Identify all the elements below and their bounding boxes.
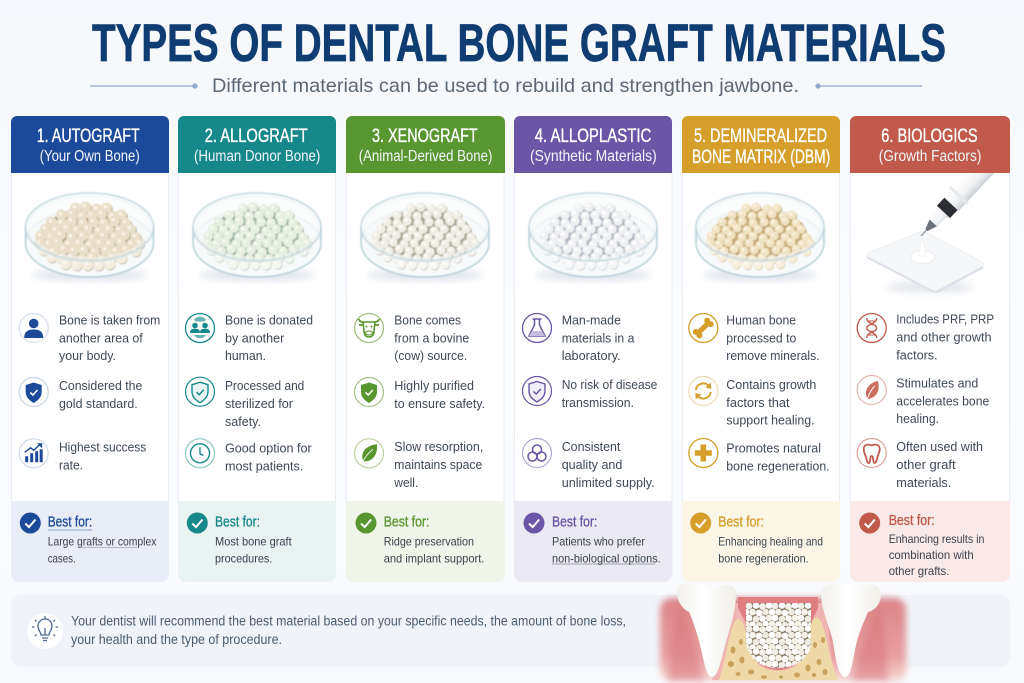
text block: processed to [726,330,796,345]
panel: demineralized bone matrix [682,116,840,582]
header: 6. BIOLOGICS [881,125,978,147]
header [346,116,505,173]
best for: Best for: [384,515,429,531]
callout: dentist note [11,595,1010,667]
panel: biologics [850,116,1010,582]
text block: most patients. [225,459,303,474]
text block: gold standard. [59,396,138,411]
header: (Your Own Bone) [40,148,140,165]
text block: materials. [896,475,951,490]
text block: from a bovine [394,330,469,345]
icon: shield outline [186,377,214,406]
text block [896,439,983,490]
text block: bone regeneration. [726,458,830,474]
panel: xenograft [346,116,505,582]
text block: factors that [726,395,790,410]
header [682,116,840,173]
header: (Human Donor Bone) [194,148,320,165]
callout text: Your dentist will recommend the best material based on your specific needs, the amount of bone loss, [71,614,626,629]
icon: shield [354,378,384,406]
text block: Bone is taken from [59,312,160,328]
text block: accelerates bone [896,394,989,408]
image: dish of beads [361,193,489,280]
text block [562,312,635,363]
text block: Processed and [225,378,304,393]
text block: Human bone [726,312,796,328]
best for: Enhancing results in [889,532,984,546]
bone [719,617,838,680]
text block: sterilized for [225,396,294,411]
text block: Highest success [59,440,147,455]
best for [682,501,840,582]
text block: Stimulates and [896,376,978,391]
text block: Highly purified [394,378,474,393]
text block [394,378,485,411]
text block [562,439,655,490]
image: dish of beads [529,193,657,280]
text block [59,312,160,363]
icon: clock [186,439,214,468]
header [514,116,672,173]
best for [346,501,505,582]
text block [394,312,469,363]
subtitle: Different materials can be used to rebuild and strengthen jawbone. [212,75,799,97]
header: 4. ALLOPLASTIC [535,125,651,147]
header: BONE MATRIX (DBM) [692,146,830,168]
text block: Bone is donated [225,312,313,328]
best for: Large grafts or complex [48,535,156,549]
left tooth [677,583,736,677]
image: syringe on plate [867,157,996,293]
best for: non-biological options. [552,551,661,565]
text block: laboratory. [562,348,621,363]
text block: maintains space [394,457,482,472]
text block: safety. [225,414,261,429]
text block [896,376,989,426]
best for [178,501,336,582]
best for [850,501,1010,582]
icon: shield [19,378,48,406]
header: (Synthetic Materials) [530,148,657,165]
panel: alloplastic [514,116,672,582]
panel: allograft [178,116,336,582]
icon: cow [354,314,384,342]
text block [225,378,304,429]
best for: Best for: [889,513,935,529]
subtitle [90,75,922,97]
text block: Considered the [59,378,142,393]
text block: and other growth [896,330,992,344]
text block: by another [225,330,285,345]
text block: Includes PRF, PRP [896,312,994,327]
image: dish of beads [696,193,824,280]
text block: Contains growth [726,377,816,392]
text block: healing. [896,411,939,426]
panel: autograft [11,116,169,582]
text block: Man-made [562,312,621,328]
header [11,116,169,173]
text block: materials in a [562,330,635,345]
graft granules [738,597,818,670]
callout text [71,614,626,647]
illustration: teeth with bone graft [660,583,906,682]
text block: rate. [59,458,83,473]
best for: other grafts. [889,564,949,578]
text block: (cow) source. [394,348,467,363]
best for: Best for: [215,515,260,531]
header [850,116,1010,173]
text block: factors. [896,348,938,362]
text block [726,440,830,474]
text block: Bone comes [394,312,461,328]
header: (Growth Factors) [879,148,981,165]
icon: chart [19,439,48,468]
text block [59,378,142,411]
text block: your body. [59,348,116,363]
best for: Best for: [718,515,764,531]
best for: Most bone graft [215,535,292,549]
text block [562,377,657,410]
text block [225,312,313,363]
icon: three circles [522,438,552,468]
icon: people [186,314,214,342]
best for: Ridge preservation [384,535,474,549]
text block: another area of [59,330,143,345]
text block: to ensure safety. [394,396,485,411]
text block: Promotes natural [726,440,821,456]
text block: well. [393,475,418,490]
icon: plus [689,438,718,468]
text block: other graft [896,457,956,472]
image: dish of beads [26,193,154,280]
right tooth [821,584,881,677]
text block [225,441,312,474]
text block: transmission. [562,395,634,410]
text block [726,312,820,363]
icon: flask [522,314,552,342]
best for: and implant support. [384,551,484,565]
header: 1. AUTOGRAFT [37,125,140,147]
text block: unlimited supply. [562,475,655,490]
icon: person [19,314,48,342]
text block: human. [225,348,266,363]
best for: Patients who prefer [552,535,645,549]
icon: DNA [857,314,886,342]
icon: leaf [857,376,886,404]
header: (Animal-Derived Bone) [359,148,492,165]
text block: quality and [562,457,622,472]
best for [11,501,169,582]
best for: procedures. [215,551,272,565]
image: dish of beads [193,193,321,280]
text block: No risk of disease [562,377,657,392]
icon: shield outline [522,376,552,406]
text block: Often used with [896,439,983,454]
icon: bone [689,314,718,342]
text block [726,377,816,428]
text block: support healing. [726,412,815,428]
header: 5. DEMINERALIZED [694,125,827,147]
text block [59,440,147,473]
icon: light bulb [27,613,63,649]
best for: cases. [48,551,76,565]
header: 3. XENOGRAFT [372,125,478,147]
callout text: your health and the type of procedure. [71,632,282,647]
text block: Good option for [225,441,312,456]
best for: combination with [889,548,974,562]
header [178,116,336,173]
best for: Best for: [48,515,92,531]
text block: Slow resorption, [394,439,483,454]
best for: bone regeneration. [718,551,809,565]
icon: tooth [857,438,886,468]
text block: remove minerals. [726,348,820,363]
text block [393,439,483,490]
text block [896,312,994,362]
best for: Best for: [552,515,597,531]
icon: cycle arrows [689,376,718,406]
icon: leaf [354,439,384,468]
header: 2. ALLOGRAFT [205,125,308,147]
best for: Enhancing healing and [718,535,823,549]
best for [514,501,672,582]
text block: Consistent [562,439,621,454]
